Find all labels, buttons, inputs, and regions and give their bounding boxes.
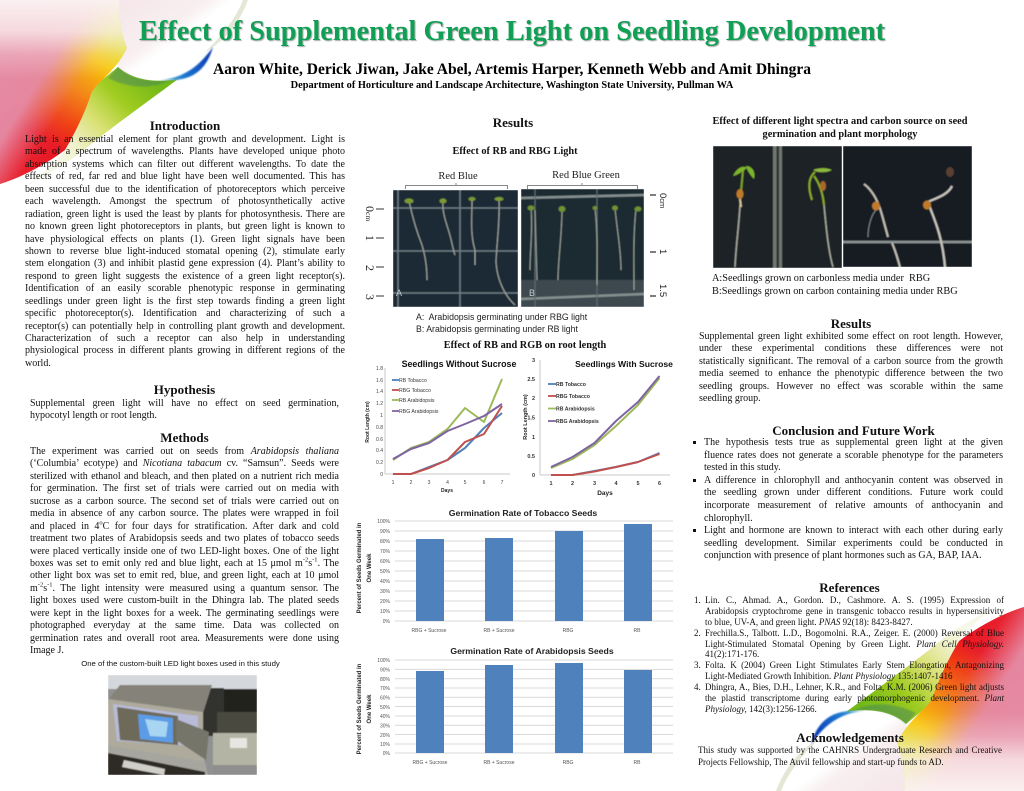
bar chart: germination rate of tobacco seeds: Percent of Seeds Germinated in (357, 522, 363, 613)
line chart: seedlings without sucrose: 5 (464, 480, 467, 486)
text: reference list: Light-Stimulated Stomatal Opening by Green Light. Plant Cell Physiology. (705, 639, 1004, 649)
text: conclusion bullets (693, 437, 1003, 561)
bar chart: germination rate of arabidopsis seeds: RBG + Sucrose (413, 760, 448, 766)
bracket: red blue green: Red Blue Green (552, 170, 621, 181)
heading: results centre: Results (493, 115, 533, 130)
bar chart: germination rate of arabidopsis seeds: One Week (367, 694, 373, 723)
photo B: seedlings under red blue green light (521, 189, 644, 307)
bar chart: germination rate of arabidopsis seeds: 10% (380, 742, 391, 748)
bar chart: germination rate of tobacco seeds: 80% (380, 539, 391, 545)
text: introduction body: Light is an essential element for plant growth and development. Light is (25, 134, 345, 145)
line chart: seedlings without sucrose: RBG Arabidopsis (399, 409, 439, 415)
text: methods body: treatment two plates of Arabidopsis seeds and two plates of tobacco seeds (30, 533, 339, 544)
text: methods body: The experiment was carried out on seeds from Arabidopsis thaliana (30, 446, 339, 457)
ruler: left scale: 1 (363, 235, 377, 241)
bar chart: germination rate of arabidopsis seeds: 0% (383, 751, 391, 757)
panel: methods (30, 430, 339, 656)
ruler: right scale: 1.5 (657, 284, 668, 297)
text: introduction body: physiological process in different plants growing in different regions of the (25, 345, 345, 356)
text: methods body: Image J. (30, 645, 64, 656)
text: conclusion bullets: The hypothesis tests true as supplemental green light at the given (704, 437, 1003, 448)
caption: light box: One of the custom-built LED light boxes used in this study (81, 659, 280, 668)
text: introduction body: Characterization of such a receptor can also help in understanding (25, 333, 345, 344)
ruler: left scale: 0 cm (363, 206, 377, 221)
heading: light spectra and carbon source: Effect of different light spectra and carbon source on seed (712, 116, 968, 127)
line chart: seedlings without sucrose: 1 (392, 480, 395, 486)
line chart: seedlings without sucrose: RB Tobacco (399, 378, 427, 384)
text: introduction body: radiation, green light is used the least by plants for photosynthesis. There are (25, 209, 345, 220)
text: reference list: to blue, UV-A, and green light. PNAS 92(18): 8423-8427. (705, 617, 913, 627)
line chart: seedlings with sucrose: Seedlings With Sucrose (575, 359, 673, 369)
text: hypothesis body: hypocotyl length or root length. (30, 410, 157, 421)
line chart: seedlings without sucrose: Root Length (cm) (365, 401, 371, 443)
text: results body: Supplemental green light exhibited some effect on root length. However, (699, 331, 1003, 342)
text: conclusion bullets: Light and hormone are known to interact with each other during early (704, 525, 1003, 536)
text: reference list: Light-Mediated Growth Inhibition. Plant Physiology 135:1407-1416 (705, 671, 952, 681)
text: methods body: (‘Columbia’ ecotype) and Nicotiana tabacum cv. “Samsun”. Seeds were (30, 458, 339, 469)
heading: references: References (819, 580, 880, 595)
line chart: seedlings without sucrose: 1.4 (376, 389, 383, 395)
ruler: left scale (363, 206, 384, 300)
text: introduction body: absorption systems which can filter out different wavelengths. To date the (25, 159, 345, 170)
line chart: seedlings without sucrose: RBG Tobacco (399, 388, 431, 394)
line chart: seedlings with sucrose: 4 (614, 481, 618, 487)
bar chart: germination rate of tobacco seeds: 20% (380, 599, 391, 605)
ruler: left scale: 3 (363, 294, 377, 300)
text: conclusion bullets: incorporate measurement of relative amounts of anthocyanin and (704, 500, 1003, 511)
bar chart: germination rate of arabidopsis seeds: Germination Rate of Arabidopsis Seeds (450, 646, 614, 656)
line chart: seedlings without sucrose: 0.2 (376, 460, 383, 466)
heading: hypothesis: Hypothesis (154, 382, 215, 397)
text: methods body: were kept in the light boxes for a week. The germinating seedlings were (30, 608, 339, 619)
line chart: seedlings without sucrose: 0 (380, 472, 383, 478)
line chart: seedlings with sucrose: 3 (532, 358, 535, 364)
text: results body: media seemed to enhance the phenotypic difference between the two (699, 368, 1003, 379)
line chart: seedlings with sucrose: 0 (532, 473, 535, 479)
line chart: seedlings without sucrose: 1.2 (376, 401, 383, 407)
text: acknowledgements body: Projects Fellowship, The Auvil fellowship and start-up funds to AD. (698, 756, 944, 766)
photo A: seedlings under red blue light: A (396, 288, 402, 298)
text: acknowledgements body (698, 744, 1002, 767)
text: reference list: Frechilla.S., Talbott. L.D., Bogomolni. R.A., Zeiger. E. (2000) Reversal of Blue (705, 628, 1004, 638)
heading: conclusion: Conclusion and Future Work (772, 423, 935, 438)
text: 3. (694, 660, 701, 670)
line chart: seedlings without sucrose: 1.8 (376, 366, 383, 372)
ruler: left scale: 2 (363, 265, 377, 271)
bar chart: germination rate of arabidopsis seeds (356, 646, 673, 766)
text: results body: seedling groups. However no effect was scorable within the same (699, 381, 1003, 392)
line chart: seedlings with sucrose: Days (597, 490, 613, 497)
heading: root length: Effect of RB and RGB on root length (444, 340, 606, 351)
line chart: seedlings without sucrose (365, 359, 516, 494)
text: methods body: other light box was set to emit red, blue, and green light, each at 10 μmol (30, 570, 339, 581)
line chart: seedlings without sucrose: 0.4 (376, 448, 383, 454)
caption: photos A and B: B: Arabidopsis germinating under RB light (416, 324, 578, 334)
heading: introduction: Introduction (150, 118, 220, 133)
text: 2. (694, 628, 701, 638)
text: introduction body (25, 134, 345, 369)
panel: acknowledgements (698, 730, 1002, 767)
line chart: seedlings with sucrose: RBG Arabidopsis (556, 419, 599, 425)
line chart: seedlings with sucrose: RBG Tobacco (556, 394, 590, 400)
bar chart: germination rate of tobacco seeds: 90% (380, 529, 391, 535)
line chart: seedlings with sucrose: RB Tobacco (556, 382, 586, 388)
text: results body: under these experimental conditions these differences were not (699, 343, 1003, 354)
photo pair: seedlings on carbonless and carbon media (713, 146, 972, 268)
bar chart: germination rate of arabidopsis seeds: 100% (377, 658, 391, 664)
text: results body: seedling group. (699, 393, 761, 404)
text: conclusion bullets: seedling development. Similar experiments could be conducted in (704, 538, 1003, 549)
bar chart: germination rate of tobacco seeds: 30% (380, 589, 391, 595)
heading: light spectra and carbon source (712, 116, 968, 140)
text: introduction body: world. (25, 358, 51, 369)
text: introduction body: each wavelength. Amongst the spectrum of photosynthetically active (25, 196, 345, 207)
text: introduction body: seedlings under green light is the first step towards finding a green light (25, 296, 345, 307)
line chart: seedlings with sucrose: 1 (549, 481, 553, 487)
text: introduction body: receptor(s) can potentially help in controlling plant growth and development. (25, 321, 345, 332)
bar chart: germination rate of tobacco seeds: RB + Sucrose (484, 628, 515, 634)
text: conclusion bullets: fluence rates does not generate a scorable phenotype for the parameters (704, 450, 1003, 461)
bar chart: germination rate of arabidopsis seeds: 80% (380, 677, 391, 683)
photo B: seedlings under red blue green light: B (529, 288, 535, 298)
line chart: seedlings with sucrose: 6 (658, 481, 661, 487)
text: conclusion bullets: tested in this study. (704, 462, 781, 473)
text: methods body: boxes was set to emit only red and blue light, each at 15 μmol m-2s-1. The (30, 557, 339, 569)
bar chart: germination rate of arabidopsis seeds: 20% (380, 733, 391, 739)
bar chart: germination rate of arabidopsis seeds: 30% (380, 724, 391, 730)
heading: results: Results (831, 316, 871, 331)
text: methods body (30, 446, 339, 656)
bar chart: germination rate of tobacco seeds: 40% (380, 579, 391, 585)
line chart: seedlings without sucrose: 6 (483, 480, 486, 486)
text: results body: statistically significant. The removal of a carbon source from the growth (699, 356, 1003, 367)
text: reference list: Dhingra, A., Bies, D.H., Lehner, K.R., and Folta, K.M. (2006) Green light adjusts (705, 682, 1004, 692)
line chart: seedlings with sucrose: 1 (532, 435, 535, 441)
text: introduction body: shown to reverse blue light-induced stomatal opening (2), stimulate early (25, 246, 345, 257)
line chart: seedlings without sucrose: 4 (446, 480, 449, 486)
caption: seedling media conditions: B:Seedlings grown on carbon containing media under RBG (712, 286, 958, 296)
text: introduction body: stem elongation (3) and inhibit plastid gene expression (4). Plant’s ability to (25, 258, 345, 269)
text: reference list: Physiology, 142(3):1256-1266. (705, 704, 817, 714)
title: Effect of Supplemental Green Light on Seedling Development (139, 16, 885, 47)
text: methods body: sterilized with ethanol and bleach, and then plated on a nutrient rich media (30, 471, 339, 482)
bracket: red blue green (528, 170, 638, 189)
ruler: right scale: 0 cm (657, 193, 668, 208)
text: reference list: the plastid transcriptome during early photomorphogenic development. Plant (705, 693, 1004, 703)
bar chart: germination rate of tobacco seeds: RBG (563, 628, 574, 634)
line chart: seedlings with sucrose: 5 (636, 481, 640, 487)
heading: RB and RBG light: Effect of RB and RBG Light (452, 146, 578, 157)
bar chart: germination rate of arabidopsis seeds: RBG (563, 760, 574, 766)
bar chart: germination rate of arabidopsis seeds: 40% (380, 714, 391, 720)
panel: conclusion and future work (693, 423, 1003, 561)
bar chart: germination rate of tobacco seeds: RB (634, 628, 641, 634)
bar chart: germination rate of arabidopsis seeds: 50% (380, 705, 391, 711)
text: acknowledgements body: This study was supported by the CAHNRS Undergraduate Research and Creative (698, 744, 1002, 754)
text: results body (699, 331, 1003, 404)
line chart: seedlings with sucrose: 1.5 (527, 416, 535, 422)
text: 1. (694, 595, 701, 605)
photo: carbonless media (713, 146, 842, 268)
bar chart: germination rate of tobacco seeds: 70% (380, 549, 391, 555)
text: methods body: photographed everyday at the same time. Data was collected on (30, 620, 339, 631)
line chart: seedlings with sucrose (523, 358, 673, 497)
heading: methods: Methods (160, 430, 209, 445)
text: introduction body: respond to green light suggests the existence of a green light receptor(s). (25, 271, 345, 282)
line chart: seedlings without sucrose: RB Arabidopsis (399, 398, 435, 404)
line chart: seedlings without sucrose: 0.6 (376, 437, 383, 443)
line chart: seedlings without sucrose: 1.6 (376, 378, 383, 384)
text: introduction body: been successful due to the identification of photoreceptors which perceive (25, 184, 345, 195)
text: methods body: m-2s-1. The light intensity were measured using a quantum sensor. The (30, 581, 339, 594)
bracket: red blue: Red Blue (438, 171, 478, 182)
panel: hypothesis (30, 382, 339, 421)
line chart: seedlings with sucrose: Root Length (cm) (523, 394, 529, 440)
text: reference list: Lin. C., Ahmad. A., Gordon. D., Cashmore. A. S. (1995) Expression of (705, 595, 1004, 605)
text: methods body: were placed vertically inside one of two LED-light boxes. One of the light (30, 546, 339, 556)
bar chart: germination rate of tobacco seeds: 0% (383, 619, 391, 625)
panel: introduction (25, 118, 345, 369)
text: methods body: light boxes used were custom-built in the Dhingra lab. The plated seeds (30, 595, 339, 606)
line chart: seedlings without sucrose: 7 (501, 480, 504, 486)
text: introduction body: made of a spectrum of wavelengths. Plants have developed unique photo (25, 146, 345, 157)
heading: acknowledgements: Acknowledgements (796, 730, 904, 745)
panel: references (694, 580, 1004, 714)
authors: Aaron White, Derick Jiwan, Jake Abel, Artemis Harper, Kenneth Webb and Amit Dhingra (213, 61, 811, 78)
bar chart: germination rate of arabidopsis seeds: 90% (380, 668, 391, 674)
text: reference list: Arabidopsis cryptochrome gene in transgenic tobacco results in hypersensitivity (705, 606, 1004, 616)
figure: seedling root photos with rulers (363, 170, 668, 307)
ruler: right scale: 1 (657, 249, 668, 254)
text: introduction body: specific photoreceptor(s). Identification and characterizing of such a (25, 308, 345, 319)
caption: photos A and B: A: Arabidopsis germinating under RBG light (416, 312, 587, 322)
text: hypothesis body (30, 398, 339, 421)
bar chart: germination rate of tobacco seeds: 100% (377, 519, 391, 525)
photo: carbon containing media (843, 146, 972, 267)
line chart: seedlings with sucrose: 0.5 (527, 454, 535, 460)
text: methods body: and placed in 4oC for four days for stratification. After dark and cold (30, 519, 339, 532)
ruler: right scale (650, 193, 668, 297)
affiliation: Department of Horticulture and Landscape Architecture, Washington State University, Pullman WA (291, 80, 733, 91)
bar chart: germination rate of arabidopsis seeds: 70% (380, 686, 391, 692)
text: hypothesis body: Supplemental green light will have no effect on seed germination, (30, 398, 339, 409)
line chart: seedlings without sucrose: Seedlings Without Sucrose (402, 359, 516, 369)
line chart: seedlings without sucrose: 0.8 (376, 425, 383, 431)
caption: photos A and B (416, 312, 588, 334)
line chart: seedlings without sucrose: 3 (428, 480, 431, 486)
text: reference list: Folta. K (2004) Green Light Stimulates Early Stem Elongation, Antagonizing (705, 660, 1004, 670)
text: conclusion bullets: chlorophyll. (704, 513, 753, 524)
bar chart: germination rate of tobacco seeds: One Week (367, 553, 373, 582)
text: 4. (694, 682, 701, 692)
bar chart: germination rate of tobacco seeds (356, 508, 673, 634)
caption: seedling media conditions: A:Seedlings grown on carbonless media under RBG (712, 273, 930, 284)
bar chart: germination rate of tobacco seeds: 10% (380, 609, 391, 615)
text: conclusion bullets: conjunction with presence of plant hormones such as GA, BAP, IAA. (704, 550, 981, 561)
line chart: seedlings without sucrose: 1 (380, 413, 383, 419)
line chart: seedlings with sucrose: 3 (593, 481, 596, 487)
bar chart: germination rate of arabidopsis seeds: Percent of Seeds Germinated in (357, 663, 363, 754)
text: methods body: sucrose as a carbon source. The second set of trials were carried out on (30, 496, 339, 507)
line chart: seedlings without sucrose: Days (441, 488, 453, 494)
text: reference list (694, 595, 1004, 714)
line chart: seedlings without sucrose: 2 (410, 480, 413, 486)
photo: LED light box (108, 675, 257, 775)
line chart: seedlings with sucrose: 2.5 (527, 377, 535, 383)
text: methods body: media in absence of any carbon source. The plates were wrapped in foil (30, 508, 339, 519)
text: introduction body: no known green light photoreceptors in plants, but green light is known to (25, 221, 345, 232)
bar chart: germination rate of tobacco seeds: RBG + Sucrose (412, 628, 447, 634)
text: conclusion bullets: the seedling grown under different conditions. Future work could (704, 487, 1003, 498)
caption: seedling media conditions (712, 273, 958, 296)
bar chart: germination rate of tobacco seeds: 60% (380, 559, 391, 565)
text: methods body: germination rates and overall root area. Measurements were done using (30, 633, 339, 644)
bar chart: germination rate of arabidopsis seeds: RB (634, 760, 641, 766)
line chart: seedlings with sucrose: 2 (532, 396, 535, 402)
bar chart: germination rate of tobacco seeds: Germination Rate of Tobacco Seeds (449, 508, 597, 518)
text: reference list: 41(2):171-176. (705, 649, 759, 659)
bar chart: germination rate of tobacco seeds: 50% (380, 569, 391, 575)
text: introduction body: have physiological effects on plants (1). Green light signals have been (25, 234, 345, 244)
heading: light spectra and carbon source: germination and plant morphology (763, 128, 917, 140)
line chart: seedlings with sucrose: RB Arabidopsis (556, 406, 595, 412)
text: conclusion bullets: A difference in chlorophyll and anthocyanin content was observed in (704, 475, 1003, 486)
photo A: seedlings under red blue light (393, 190, 518, 307)
panel: results right (699, 316, 1003, 404)
bar chart: germination rate of arabidopsis seeds: 60% (380, 696, 391, 702)
line chart: seedlings with sucrose: 2 (571, 481, 574, 487)
bracket: red blue (406, 171, 508, 189)
text: introduction body: effects of red, far red and blue light have been well documented. This has (25, 171, 345, 182)
text: methods body: for germination. The first set of trials were carried out on media with (30, 483, 339, 494)
bar chart: germination rate of arabidopsis seeds: RB + Sucrose (484, 760, 515, 766)
text: introduction body: Identification of an easily scorable phenotypic response in germinating (25, 283, 345, 294)
